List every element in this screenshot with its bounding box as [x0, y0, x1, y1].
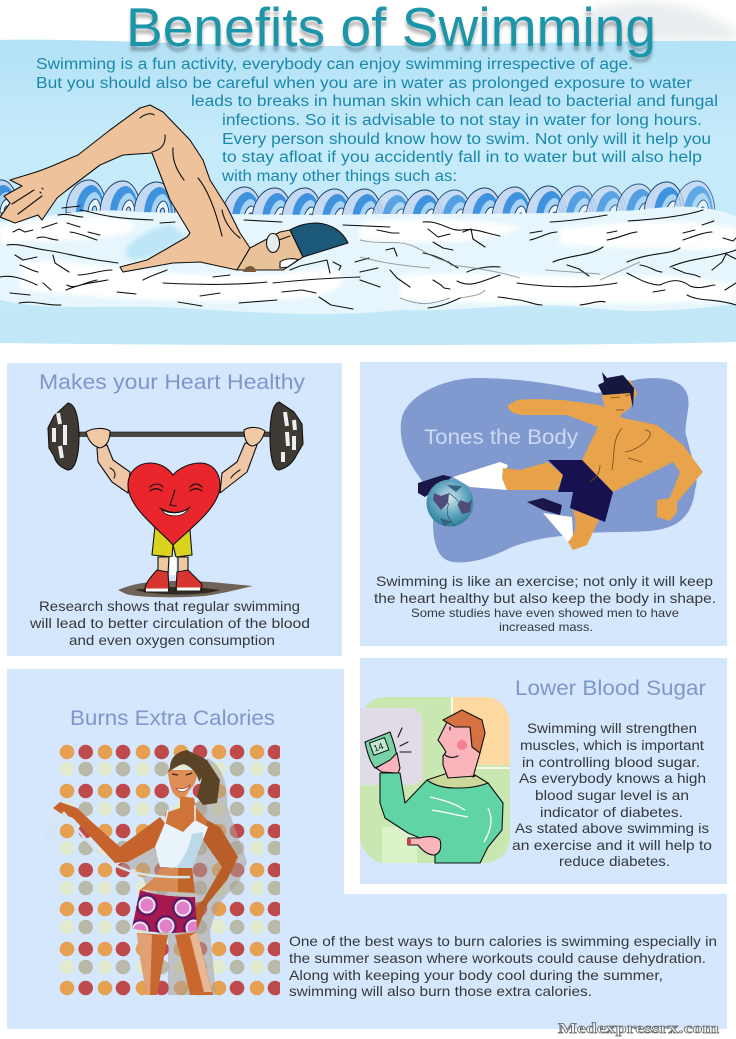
intro paragraph: to stay afloat if you accidently fall in to water but will also help [222, 149, 702, 166]
soccer ball [426, 480, 474, 526]
midriff [140, 868, 195, 893]
heading: lower blood sugar: Lower Blood Sugar [515, 677, 706, 700]
body text: tones the body [374, 573, 716, 634]
face [438, 720, 480, 778]
left leg [137, 933, 168, 995]
body text: burns extra calories: the summer season where workouts could cause dehydration. [289, 950, 706, 966]
heading: burns extra calories: Burns Extra Calories [70, 707, 275, 730]
grey shadow [118, 758, 247, 995]
body text: tones the body: Some studies have even showed men to have [411, 606, 679, 620]
panel: tones the body [360, 362, 727, 646]
header water scene [0, 2, 736, 345]
body text: heart: Research shows that regular swimming [39, 598, 300, 614]
skirt [132, 890, 197, 933]
swimmer [0, 105, 348, 272]
panel: heart [7, 363, 342, 656]
dot pattern [60, 745, 282, 995]
intro paragraph: leads to breaks in human skin which can lead to bacterial and fungal [191, 93, 718, 110]
body text: lower blood sugar [512, 720, 712, 869]
right arm [195, 820, 238, 930]
body text: lower blood sugar: Swimming will strengthen [527, 720, 697, 736]
body text: lower blood sugar: reduce diabetes. [559, 853, 670, 869]
hair [598, 372, 634, 408]
watermark: Medexpressrx.com [558, 1021, 720, 1037]
intro paragraph: infections. So it is advisable to not stay in water for long hours. [222, 112, 702, 129]
body text: heart: and even oxygen consumption [69, 632, 275, 648]
right leg [175, 932, 213, 995]
torso and arms [508, 399, 703, 521]
head [602, 380, 637, 418]
skirt flowers [132, 894, 197, 933]
body text: heart: will lead to better circulation of the blood [29, 615, 310, 631]
neck and chest [165, 796, 207, 840]
body text: lower blood sugar: As stated above swimming is [515, 820, 709, 836]
body text: lower blood sugar: As everybody knows a high [519, 770, 706, 786]
body text: tones the body: increased mass. [499, 620, 593, 634]
heading: heart: Makes your Heart Healthy [39, 371, 306, 394]
body text: lower blood sugar: an exercise and it will help to [512, 837, 712, 853]
icon: heart lifting barbell [48, 402, 303, 597]
head [168, 770, 197, 798]
hand with test strip [408, 837, 441, 855]
panel: burns extra calories [7, 669, 727, 1029]
mist cloud [585, 2, 736, 42]
kicking leg [453, 462, 508, 490]
body text: burns extra calories: Along with keeping your body cool during the summer, [289, 967, 663, 983]
body text: burns extra calories: swimming will also burn those extra calories. [289, 983, 592, 999]
intro paragraph [36, 56, 718, 185]
heading: tones the body: Tones the Body [424, 426, 579, 449]
body text: burns extra calories [289, 933, 717, 999]
swim cap [290, 223, 348, 257]
sweater [380, 773, 503, 863]
water background [0, 40, 736, 345]
panel: lower blood sugar [360, 658, 727, 884]
intro paragraph: Swimming is a fun activity, everybody can enjoy swimming irrespective of age. [36, 56, 633, 73]
wave lines [0, 206, 390, 309]
body text: lower blood sugar: in controlling blood sugar. [522, 754, 700, 770]
measuring tape [47, 812, 190, 877]
arm and torso [0, 105, 250, 272]
splashing white water [0, 207, 736, 314]
body text: lower blood sugar: indicator of diabetes. [540, 804, 683, 820]
intro paragraph: But you should also be careful when you are in water as prolonged exposure to water [36, 75, 692, 92]
body text: burns extra calories: One of the best ways to burn calories is swimming especially in [289, 933, 717, 949]
hair [443, 710, 485, 753]
body text: lower blood sugar: blood sugar level is an [535, 787, 689, 803]
face [237, 230, 303, 270]
body text: tones the body: the heart healthy but also keep the body in shape. [374, 590, 716, 606]
white top [155, 820, 208, 868]
lane rope floats [0, 180, 715, 223]
icon: soccer player kicking [418, 372, 703, 550]
blue blob backdrop [401, 378, 697, 562]
icon: man with glucose meter [360, 697, 510, 863]
intro paragraph: with many other things such as: [221, 168, 457, 185]
body text: lower blood sugar: muscles, which is important [520, 737, 704, 753]
goggles [266, 234, 280, 252]
blue gap under arm [126, 224, 187, 260]
intro paragraph: Every person should know how to swim. Not only will it help you [222, 131, 711, 148]
glucose meter: 14 [372, 741, 385, 754]
back leg [543, 513, 573, 542]
body text: heart [29, 598, 310, 648]
hand holding meter [376, 753, 400, 773]
glucose meter [365, 732, 397, 768]
hair [168, 750, 220, 805]
icon: woman measuring waist [47, 750, 247, 995]
left arm [53, 802, 165, 863]
white foam highlights [0, 216, 736, 304]
body text: tones the body: Swimming is like an exercise; not only it will keep [376, 573, 713, 589]
shorts [548, 460, 613, 522]
